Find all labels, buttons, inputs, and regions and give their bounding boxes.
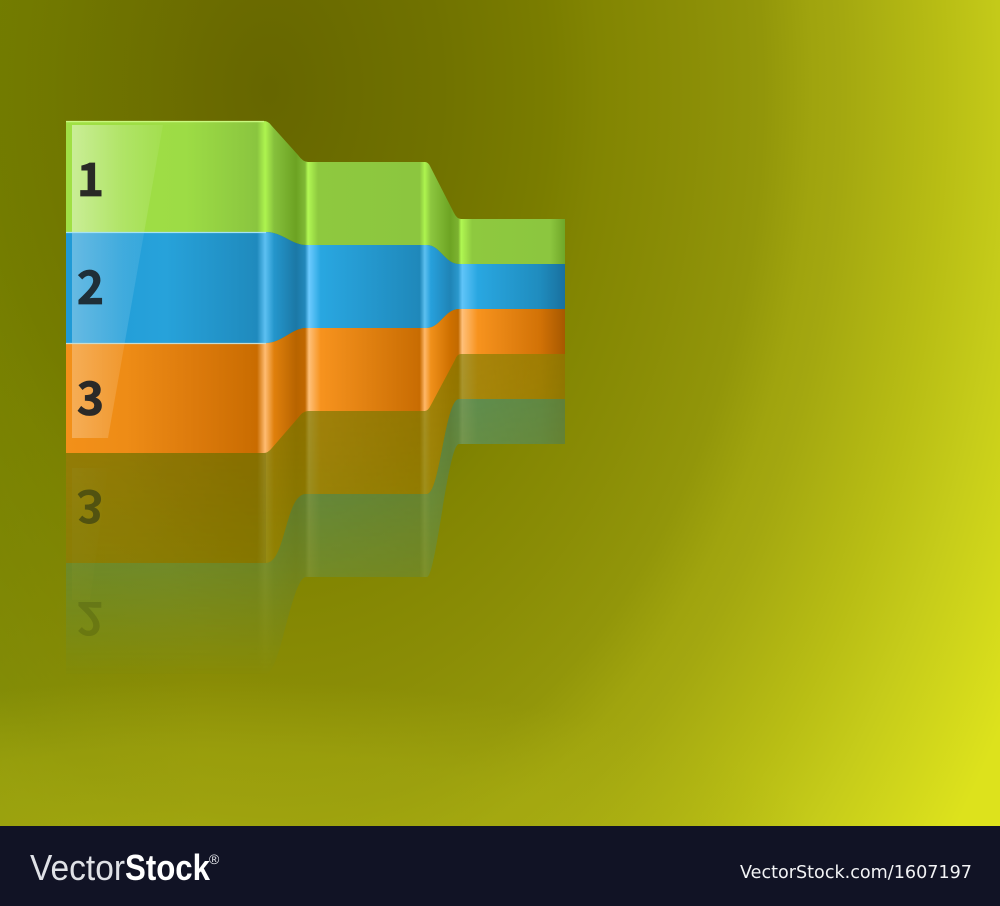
VectorStock logo wordmark bold: Stock (125, 847, 211, 888)
orange top highlight (66, 342, 266, 344)
orange gloss panel (72, 343, 125, 438)
reflection of ribbon (66, 354, 565, 674)
reflected numeral 3: 3 (76, 476, 104, 542)
reflected orange band (66, 354, 565, 563)
numeral 2: 2 (77, 252, 104, 318)
reflected blue band (66, 399, 565, 674)
ribbon infographic (66, 121, 565, 453)
reflected numeral 2: 2 (76, 588, 104, 654)
footer bar (0, 826, 1000, 906)
left reflection shade (66, 453, 266, 563)
VectorStock logo wordmark light: Vector (30, 847, 125, 888)
green band (66, 121, 565, 264)
green top highlight (66, 121, 264, 123)
reflected gloss panel (72, 468, 108, 600)
numeral 3: 3 (77, 363, 104, 429)
orange band (66, 309, 565, 453)
registered mark: ® (209, 851, 220, 867)
image id: VectorStock.com/1607197 (740, 862, 972, 883)
blue gloss panel (72, 232, 144, 343)
blue band (66, 232, 565, 343)
green gloss panel (72, 125, 163, 232)
blue top highlight (66, 232, 266, 234)
numeral 1: 1 (77, 144, 104, 210)
